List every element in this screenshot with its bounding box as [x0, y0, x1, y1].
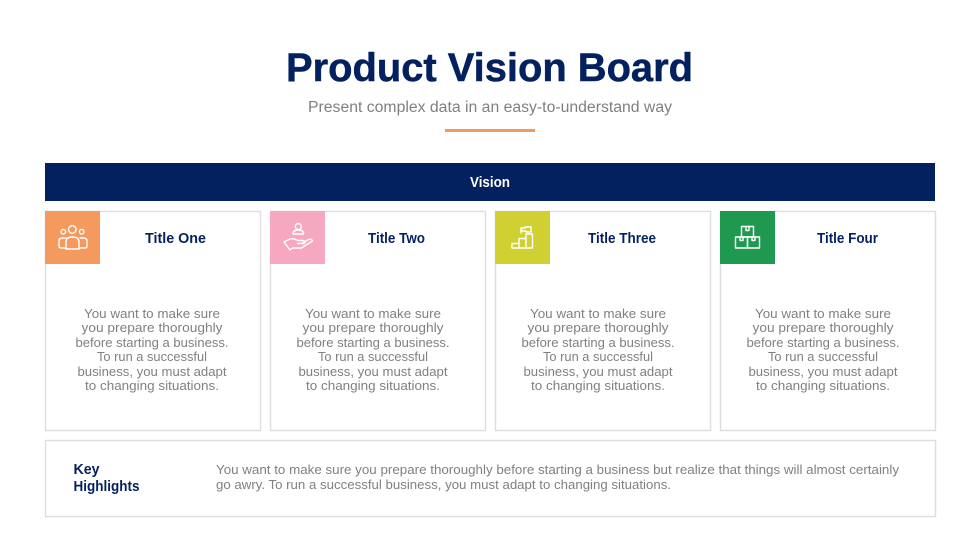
accent underline [445, 129, 535, 132]
text block: title two: you prepare thoroughly [302, 320, 444, 335]
vision banner [45, 163, 935, 201]
icon: hand holding person [270, 211, 325, 264]
text block: title one: business, you must adapt [78, 364, 227, 379]
heading: key highlights: Highlights [74, 479, 140, 495]
icon: rising bars with flag [495, 211, 550, 264]
title: Product Vision Board [286, 46, 693, 90]
text block: title one: To run a successful [97, 349, 207, 364]
text block: title one: before starting a business. [76, 335, 228, 350]
text block: title four: to changing situations. [756, 378, 890, 393]
panel: title one [45, 211, 260, 430]
vision banner: Vision [470, 175, 510, 191]
text block: title four: To run a successful [768, 349, 878, 364]
icon: stacked boxes [720, 211, 775, 264]
text block: title two [296, 306, 450, 393]
heading: title three: Title Three [588, 231, 656, 247]
text block: title one: you prepare thoroughly [82, 320, 223, 335]
text block: title four: business, you must adapt [748, 364, 898, 379]
text block: title three: you prepare thoroughly [528, 320, 669, 335]
text block: title three: business, you must adapt [524, 364, 673, 379]
text block: title three: You want to make sure [530, 306, 666, 321]
text block: title one: to changing situations. [85, 378, 219, 393]
text block: title three: to changing situations. [531, 378, 665, 393]
text block: title two: to changing situations. [306, 378, 440, 393]
text block: title one [76, 306, 228, 393]
heading: key highlights: Key [74, 462, 100, 478]
panel: title three [495, 211, 710, 430]
panel: title four [720, 211, 936, 430]
heading: title two: Title Two [368, 231, 425, 247]
text block: title three [522, 306, 674, 393]
heading: key highlights [74, 462, 140, 495]
text block: title two: before starting a business. [296, 335, 450, 350]
heading: title one: Title One [145, 231, 206, 247]
panel: title two [270, 211, 486, 430]
text block: title four: you prepare thoroughly [752, 320, 894, 335]
text block: title two: business, you must adapt [298, 364, 448, 379]
text block: title two: You want to make sure [305, 306, 441, 321]
icon: people group [45, 211, 100, 264]
panel: key highlights [46, 440, 936, 516]
text block: key highlights: You want to make sure you prepare thoroughly before starting a business but realize that things will almost certainly [216, 462, 900, 477]
text block: title three: To run a successful [543, 349, 653, 364]
text block: title one: You want to make sure [84, 306, 220, 321]
text block: title four: before starting a business. [746, 335, 900, 350]
text block: title two: To run a successful [318, 349, 428, 364]
subtitle: Present complex data in an easy-to-understand way [308, 99, 672, 116]
text block: title four [746, 306, 900, 393]
text block: title four: You want to make sure [755, 306, 891, 321]
text block: title three: before starting a business. [522, 335, 674, 350]
text block: key highlights [216, 462, 900, 492]
text block: key highlights: go awry. To run a successful business, you must adapt to changing situations. [216, 477, 671, 492]
heading: title four: Title Four [817, 231, 878, 247]
